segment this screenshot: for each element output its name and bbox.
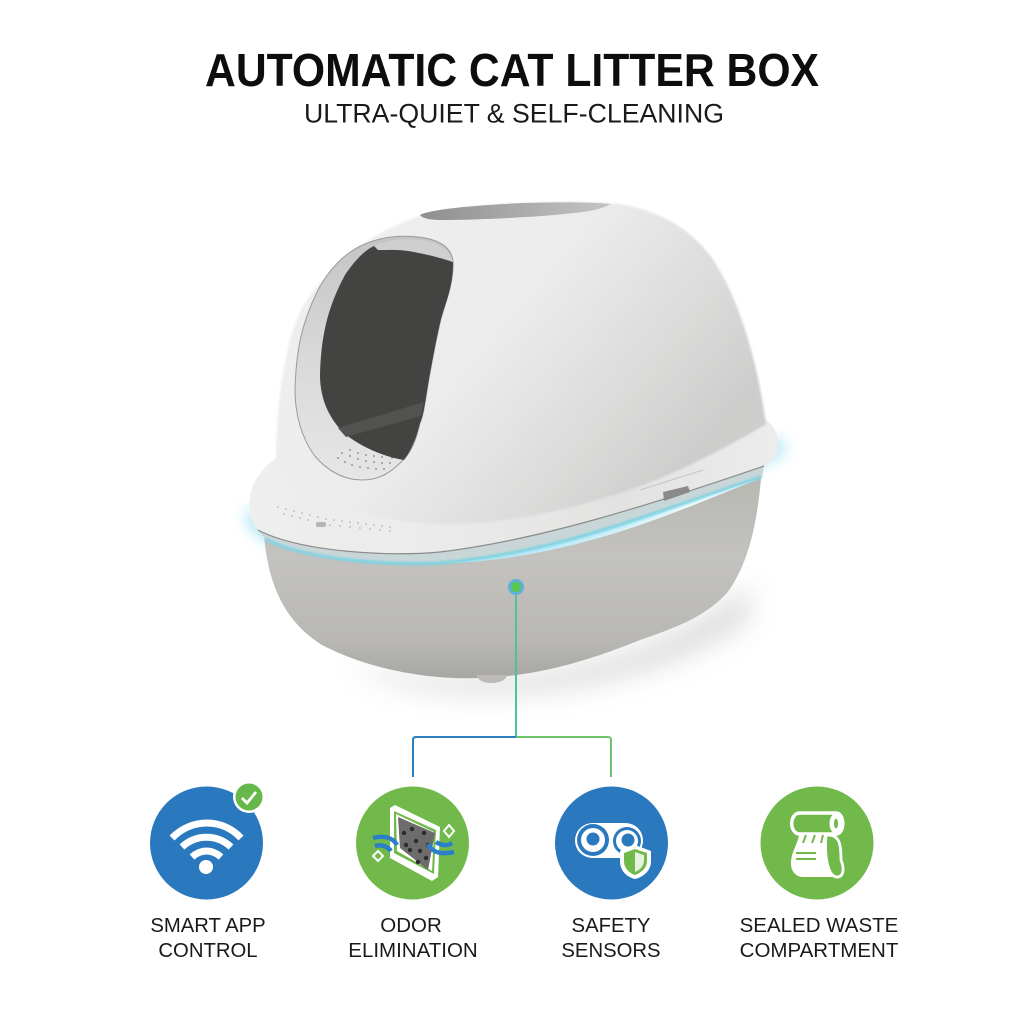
label: CONTROL — [158, 940, 258, 962]
icon: wifi — [150, 781, 265, 900]
feature: smart app control — [150, 781, 266, 962]
rear latch — [663, 486, 690, 501]
feature: sealed waste compartment — [740, 786, 899, 962]
latch highlight line — [640, 470, 703, 490]
entrance interior — [320, 246, 453, 460]
feature: odor elimination — [348, 786, 478, 962]
subtitle: ULTRA-QUIET & SELF-CLEANING — [304, 98, 724, 128]
label: COMPARTMENT — [740, 939, 899, 962]
label: SMART APP — [150, 915, 266, 937]
vent dots — [337, 449, 393, 470]
rim — [249, 419, 778, 554]
label: ODOR — [380, 914, 442, 937]
band under seam — [258, 466, 764, 564]
LED glow — [252, 445, 782, 562]
entrance — [295, 236, 453, 480]
connector lines — [413, 595, 611, 777]
entrance bezel — [295, 236, 453, 480]
check badge — [233, 781, 265, 813]
icon: waste roll — [760, 786, 874, 900]
icon: filter — [356, 786, 469, 900]
base tub — [264, 478, 761, 678]
top slot — [420, 202, 611, 220]
label: ELIMINATION — [348, 939, 478, 962]
label: SEALED WASTE — [740, 914, 898, 937]
rim seam — [258, 466, 764, 554]
hood — [276, 202, 766, 524]
interior top highlight — [374, 239, 453, 262]
icon: sensors and shield — [555, 786, 668, 900]
label: SAFETY — [572, 915, 651, 937]
rim button — [316, 522, 326, 527]
rim dots — [277, 506, 391, 532]
feature: safety sensors — [555, 786, 668, 962]
interior ledge — [338, 402, 424, 437]
LED strip — [266, 477, 761, 564]
hotspot marker — [508, 579, 524, 595]
foot — [477, 675, 507, 683]
ground shadow — [350, 585, 750, 695]
label: SENSORS — [561, 940, 661, 962]
product: litter box — [249, 202, 782, 695]
title: AUTOMATIC CAT LITTER BOX — [205, 44, 819, 96]
